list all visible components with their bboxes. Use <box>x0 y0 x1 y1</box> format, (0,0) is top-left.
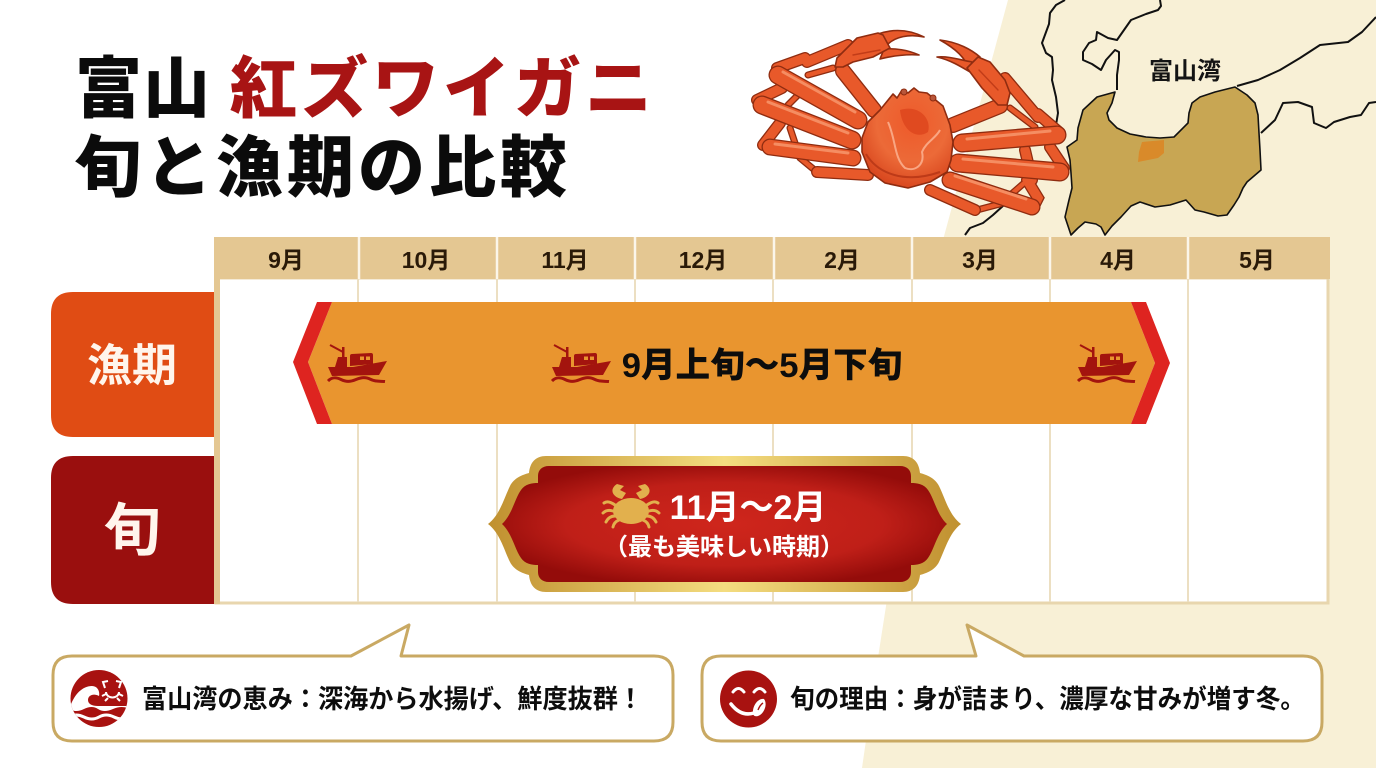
right claw <box>937 40 1010 105</box>
carapace markings <box>900 109 929 135</box>
header row: 5月 <box>1239 247 1275 273</box>
row label: peak season: 旬 <box>104 499 160 563</box>
icon: boat centre <box>552 345 611 382</box>
header row <box>214 237 1330 279</box>
month table <box>214 237 1330 604</box>
map label: 富山湾 <box>1149 58 1221 85</box>
title: 旬と漁期の比較 <box>74 131 571 206</box>
fishing season bar <box>293 302 1170 424</box>
left chevron <box>293 302 332 424</box>
Niigata coastline <box>1237 17 1376 86</box>
left claw arm <box>843 71 874 110</box>
header row: 3月 <box>962 247 998 273</box>
badge note: （最も美味しい時期） <box>604 534 844 561</box>
row label: peak season <box>51 456 214 604</box>
title: 紅ズワイガニ <box>230 52 656 127</box>
Toyama city highlight <box>1138 140 1164 162</box>
right claw arm <box>953 106 1000 125</box>
badge heading: 11月〜2月 <box>670 489 826 527</box>
row label: fishing season <box>51 292 214 437</box>
row label: fishing season: 漁期 <box>87 340 177 391</box>
icon: boat left <box>328 345 387 382</box>
header row: 2月 <box>824 247 860 273</box>
Toyama prefecture <box>1065 87 1261 235</box>
prefecture border <box>1261 102 1376 133</box>
leg highlights <box>768 72 1053 199</box>
header row: 11月 <box>541 247 589 273</box>
title: 富山 <box>75 52 211 127</box>
table body <box>216 278 1328 603</box>
southwest border <box>965 205 1004 235</box>
back leg segments fill <box>757 45 1064 210</box>
left claw <box>835 30 924 67</box>
header row: 9月 <box>268 247 304 273</box>
right chevron <box>1131 302 1170 424</box>
Noto east coastline <box>1083 0 1161 90</box>
title <box>74 52 656 206</box>
callout: peak reason <box>702 625 1322 741</box>
callout: Toyama Bay <box>53 625 673 741</box>
icon: gold crab <box>603 484 659 527</box>
icon: wave and crab <box>68 670 130 727</box>
cream background <box>862 0 1376 768</box>
header row: 10月 <box>402 247 450 273</box>
icon: smiling face <box>720 670 777 728</box>
thick legs fill <box>762 75 1060 210</box>
crab illustration <box>757 30 1064 210</box>
map of Toyama <box>965 0 1376 235</box>
header row: 12月 <box>679 247 727 273</box>
Noto peninsula coastline <box>1042 0 1065 125</box>
thick legs outline <box>762 75 1060 210</box>
callout text: 旬の理由：身が詰まり、濃厚な甘みが増す冬。 <box>790 684 1305 714</box>
icon: boat right <box>1078 345 1137 382</box>
carapace <box>862 88 953 188</box>
header row: 4月 <box>1100 247 1136 273</box>
callout text: 富山湾の恵み：深海から水揚げ、鮮度抜群！ <box>142 684 643 714</box>
back leg segments outline <box>757 45 1064 210</box>
bar text: 9月上旬〜5月下旬 <box>622 347 902 385</box>
peak season badge <box>488 456 961 592</box>
crab eyes <box>901 89 936 101</box>
